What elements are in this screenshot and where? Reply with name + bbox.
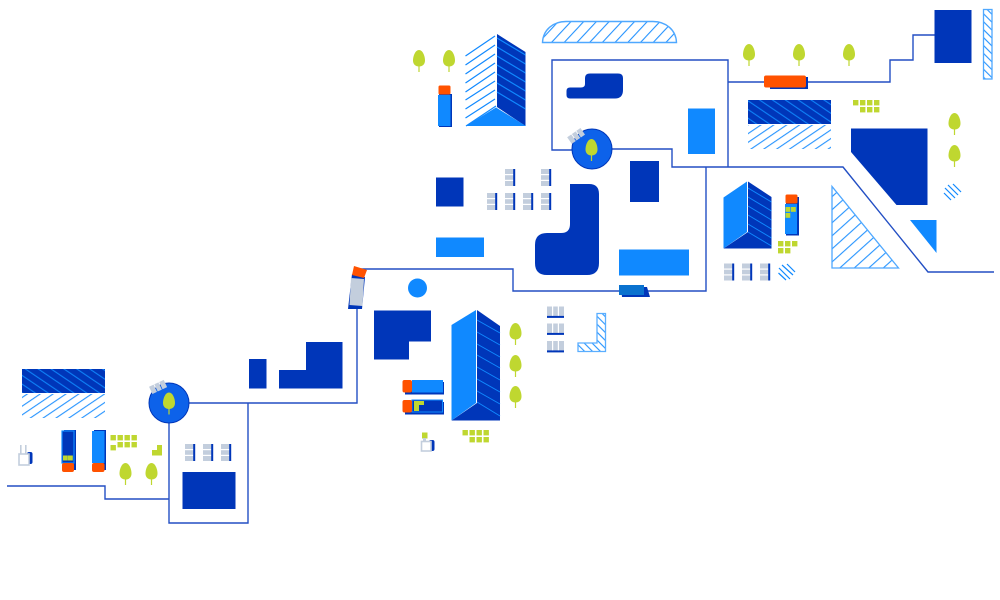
panel: upper district — [413, 22, 715, 169]
trees — [948, 113, 960, 167]
solar panels — [547, 306, 564, 352]
building block — [934, 10, 972, 63]
light block — [619, 250, 689, 276]
hatched L-shaped lot — [578, 314, 606, 352]
solar panels — [724, 264, 770, 280]
building block — [249, 359, 266, 388]
panel: lower-left district — [19, 342, 342, 509]
truck: dark with cargo — [402, 400, 444, 414]
trees — [413, 50, 455, 72]
striped parking lot — [748, 100, 831, 149]
circular plaza — [408, 278, 427, 298]
truck: orange — [764, 76, 808, 89]
trees — [743, 44, 855, 66]
truck: on road — [619, 285, 650, 297]
hatched triangle lot — [832, 186, 898, 268]
hatched arch — [542, 22, 676, 42]
panel: right district — [724, 10, 992, 280]
solar panels — [185, 444, 231, 461]
trees — [120, 463, 158, 485]
truck: blue with orange cab — [438, 86, 452, 127]
crate group — [778, 241, 797, 253]
truck: dark with orange cab — [62, 430, 76, 472]
panel: central district — [348, 161, 689, 451]
light block — [436, 238, 484, 257]
angled building — [851, 128, 928, 205]
truck: blue with cargo — [785, 194, 799, 236]
hatched circle — [944, 184, 961, 200]
stepped building — [279, 342, 342, 388]
crate group — [110, 435, 137, 450]
solar panels — [487, 169, 551, 210]
crate group — [853, 100, 879, 112]
building block — [182, 472, 236, 509]
L-shaped building — [374, 310, 431, 360]
light triangle — [910, 220, 936, 253]
truck: blue with orange cab — [92, 430, 106, 472]
icon: small kiosk — [19, 445, 32, 465]
building block — [436, 178, 464, 206]
roundabout with tree — [149, 380, 189, 423]
hatched strip — [984, 10, 992, 79]
truck: blue — [402, 380, 444, 394]
icon: small kiosk — [422, 432, 434, 451]
tower building — [724, 182, 772, 248]
light block — [688, 108, 715, 154]
roundabout with tree — [567, 128, 612, 169]
crate stack — [152, 445, 162, 456]
crate group — [462, 430, 489, 442]
tower building — [452, 310, 500, 420]
truck: grey trailer with orange cab — [348, 266, 367, 309]
building block — [630, 161, 659, 202]
hatched tower building — [466, 34, 526, 126]
striped parking lot — [22, 369, 105, 418]
rounded building — [566, 74, 623, 98]
hatched circle — [778, 264, 795, 280]
trees — [510, 323, 522, 408]
large L-shaped building — [535, 184, 599, 275]
